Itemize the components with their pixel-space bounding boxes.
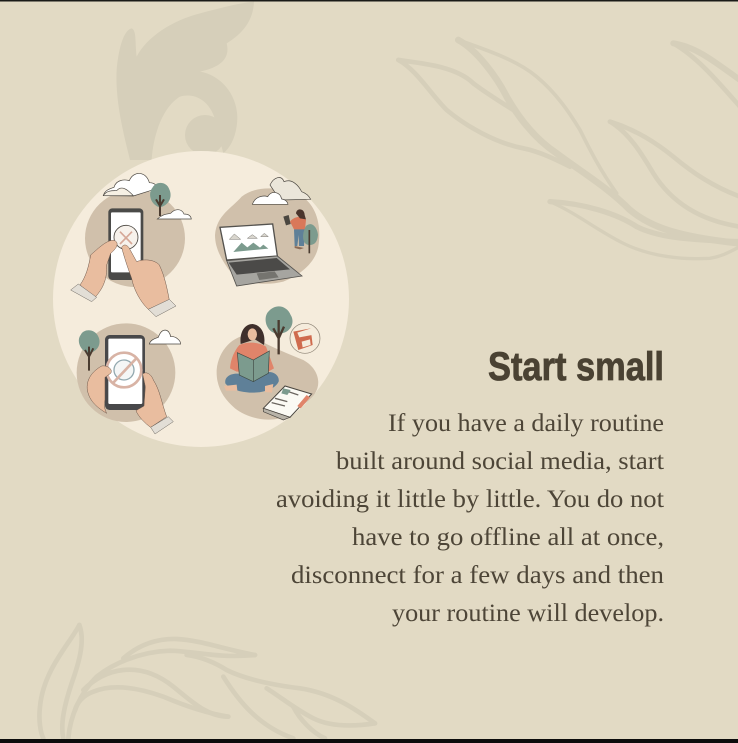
body text: have to go offline all at once, (352, 524, 664, 551)
background ornament: top-left scroll (116, 2, 254, 160)
body text (276, 410, 665, 627)
body text: avoiding it little by little. You do not (276, 486, 664, 513)
body text: disconnect for a few days and then (291, 562, 665, 589)
icon: laptop with person and tree (215, 178, 319, 286)
body text: your routine will develop. (392, 600, 664, 627)
icon: woman reading a book (217, 306, 320, 420)
body text: built around social media, start (336, 448, 664, 475)
background leaves: bottom-left branch (39, 625, 375, 738)
icon: finger tapping X on phone (71, 173, 191, 317)
illustration circle (53, 151, 349, 447)
body text: If you have a daily routine (388, 410, 664, 437)
background leaves: top-right branch (398, 40, 738, 259)
heading: Start small (488, 345, 664, 389)
icon: hands holding phone with block sign (77, 323, 181, 434)
cream circle backdrop (53, 151, 349, 447)
